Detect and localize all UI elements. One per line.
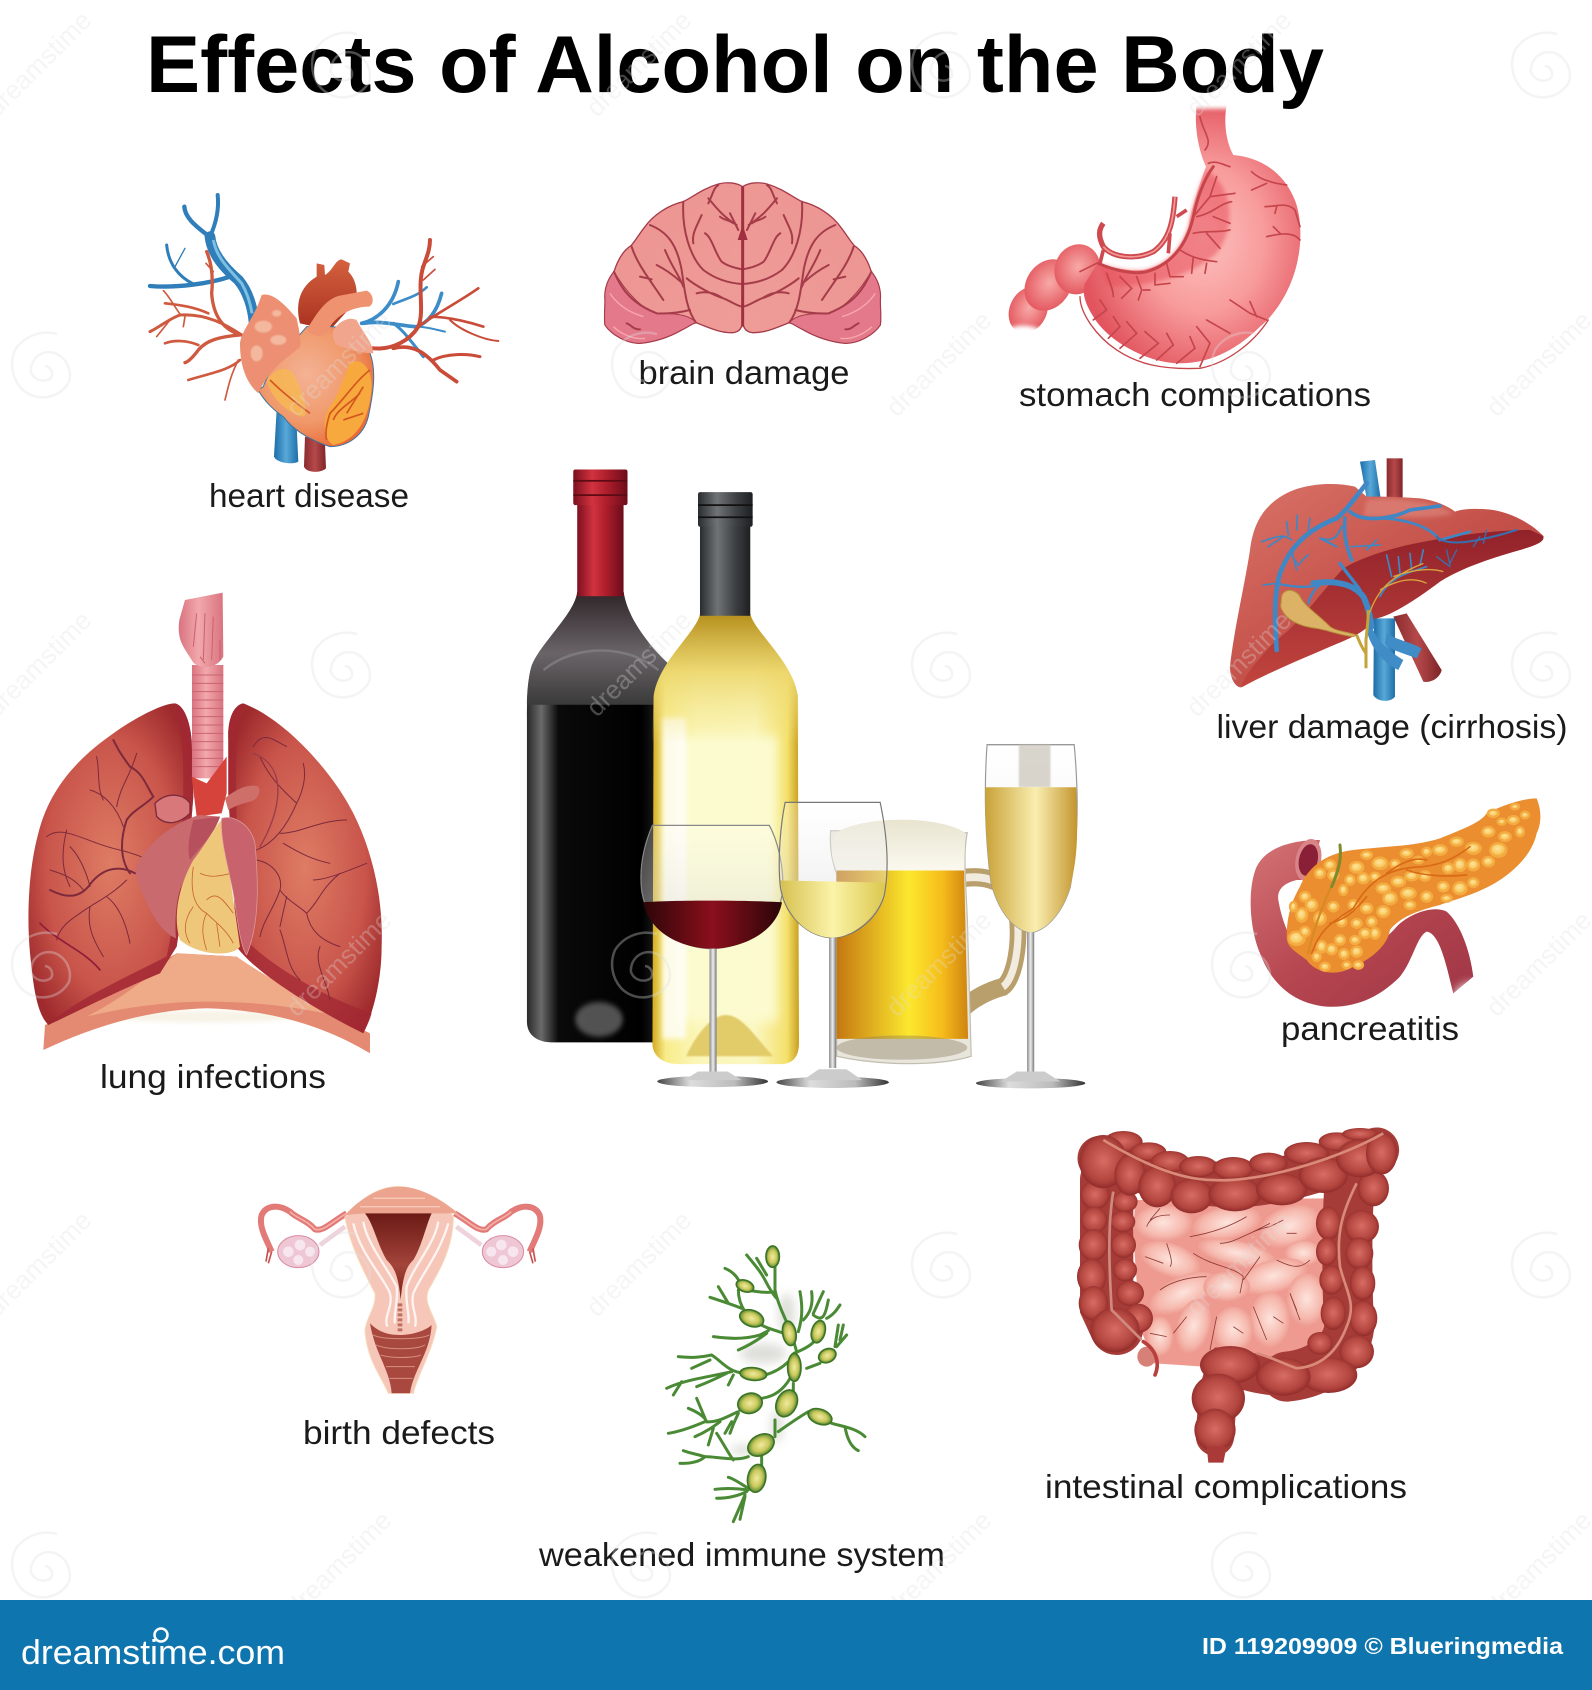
- right tube and ovary: [455, 1207, 540, 1268]
- label: liver damage: liver damage (cirrhosis): [1216, 708, 1568, 745]
- duodenum: [1001, 238, 1107, 340]
- footer credit: ID 119209909 © Blueringmedia: [1202, 1633, 1563, 1659]
- vessels behind: [1360, 460, 1381, 498]
- colon backing band: [1100, 1150, 1377, 1437]
- heart: [177, 820, 240, 953]
- watermark overlay: dreamstime: [580, 5, 697, 122]
- liver lobes: [1230, 484, 1544, 687]
- midline fissure: [738, 187, 747, 327]
- left atrium: [240, 295, 300, 393]
- coronary fat patches: [267, 369, 306, 417]
- taeniae: [1103, 1133, 1383, 1368]
- label: brain damage: brain damage: [638, 354, 850, 391]
- stomach vessels: [1080, 117, 1300, 369]
- title: Effects of Alcohol on the Body: [146, 20, 1324, 110]
- pericardial folds: [135, 815, 220, 938]
- label: stomach complications: stomach complications: [1019, 376, 1371, 413]
- icon: uterus: [261, 1187, 540, 1393]
- beer mug: [830, 820, 1018, 1064]
- watermark overlay: dreamstime: [880, 1505, 997, 1622]
- ascending colon: [1077, 1180, 1153, 1352]
- watermark overlay: dreamstime: [280, 1505, 397, 1622]
- label: weakened immune system: weakened immune system: [538, 1536, 945, 1573]
- small bowel: [1133, 1198, 1327, 1367]
- champagne flute: [976, 745, 1085, 1088]
- tubes lower: [1373, 618, 1395, 701]
- label: birth defects: birth defects: [303, 1414, 495, 1451]
- pancreatic ducts: [1312, 847, 1470, 953]
- watermark overlay: dreamstime: [580, 605, 697, 722]
- white wine bottle: [652, 492, 799, 1064]
- uterine wall: [345, 1187, 453, 1393]
- watermark overlay: dreamstime: [880, 905, 997, 1022]
- watermark overlay: dreamstime: [1180, 1205, 1297, 1322]
- cell bodies: [735, 1246, 838, 1494]
- soft shadows: [730, 1293, 795, 1455]
- lobules: [1289, 804, 1529, 971]
- icon: intestines: [1077, 1128, 1397, 1463]
- watermark overlay: dreamstime: [580, 1205, 697, 1322]
- bile duct: [1368, 563, 1443, 617]
- blue vessel tree: [1262, 483, 1517, 650]
- gallbladder: [1281, 590, 1357, 637]
- watermark overlay: dreamstime: [880, 305, 997, 422]
- footer logo text: dreamstime.com: [21, 1634, 285, 1672]
- icon: heart: [150, 195, 498, 472]
- vaginal canal: [370, 1323, 432, 1393]
- aortic arch: [298, 259, 357, 330]
- duodenum opening: [1292, 836, 1325, 883]
- ventricles: [258, 327, 374, 447]
- watermark overlay: dreamstime: [280, 905, 397, 1022]
- footer logo spiral: [154, 1628, 168, 1642]
- lung vessels: [40, 738, 367, 1000]
- red wine bottle: [527, 470, 670, 1042]
- diaphragm: [43, 953, 370, 1053]
- myometrium folds: [353, 1222, 448, 1327]
- label: pancreatitis: pancreatitis: [1281, 1010, 1459, 1047]
- left tube and ovary: [261, 1207, 347, 1268]
- gland body: [1287, 798, 1540, 973]
- icon: stomach: [1001, 100, 1300, 369]
- appendix: [1137, 1347, 1156, 1367]
- label: heart disease: heart disease: [209, 477, 409, 514]
- watermark overlay: dreamstime: [1180, 5, 1297, 122]
- descending colon: [1299, 1170, 1389, 1393]
- right hemisphere: [743, 183, 881, 343]
- lesser curvature shading: [1099, 170, 1230, 287]
- illustration: bottles and glasses: [527, 470, 1085, 1088]
- label: intestinal complications: intestinal complications: [1045, 1468, 1407, 1505]
- fundus: [345, 1187, 458, 1215]
- white wine glass: [776, 802, 889, 1088]
- bottom great vessels: [274, 410, 298, 463]
- larynx: [179, 593, 223, 667]
- duodenum loop: [1251, 840, 1473, 1007]
- footer bar: [0, 1600, 1592, 1690]
- red wine glass: [641, 825, 783, 1087]
- diaphragm shadow: [113, 1011, 300, 1023]
- cavity: [365, 1213, 432, 1300]
- sigmoid and rectum: [1192, 1346, 1311, 1451]
- icon: liver: [1230, 458, 1544, 701]
- icon: pancreas: [1251, 798, 1540, 1010]
- left arteries: [150, 252, 242, 400]
- icon: lymphatic cells: [667, 1246, 865, 1522]
- underside: [1242, 530, 1544, 687]
- branches: [667, 1255, 865, 1522]
- watermark overlay: dreamstime: [280, 305, 397, 422]
- left veins: [150, 195, 254, 322]
- transverse colon front: [1079, 1132, 1397, 1213]
- colon back row: [1104, 1128, 1378, 1180]
- right lung: [228, 703, 382, 1033]
- gastric artery: [1100, 197, 1175, 257]
- pulmonary artery: [307, 291, 373, 336]
- left lung: [28, 703, 193, 1025]
- left hemisphere: [605, 183, 743, 343]
- icon: lungs: [28, 593, 382, 1053]
- icon: brain: [605, 183, 881, 343]
- label: lung infections: lung infections: [100, 1058, 326, 1095]
- right vessels: [362, 282, 445, 357]
- right atrium: [333, 319, 373, 353]
- watermark overlay: dreamstime: [1180, 605, 1297, 722]
- stomach body: [1084, 105, 1300, 363]
- trachea: [192, 665, 223, 778]
- fades: [1190, 100, 1233, 109]
- great vessels: [192, 757, 227, 817]
